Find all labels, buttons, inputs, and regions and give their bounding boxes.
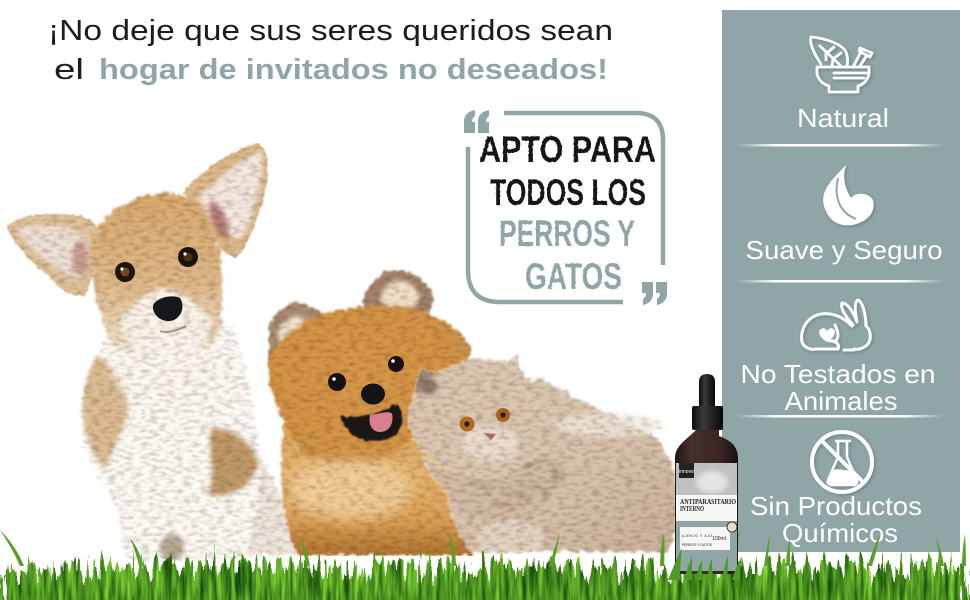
kitten dark fur marks (470, 482, 550, 510)
corgi hind shadow between legs (160, 534, 184, 562)
corgi puppy (7, 143, 297, 562)
label: natural: Natural (797, 103, 889, 133)
pomeranian chest (288, 460, 412, 520)
kitten eyes (460, 408, 510, 432)
kitten fur (408, 352, 678, 554)
grass (0, 566, 970, 600)
icon: mortar with leaf (811, 37, 872, 92)
corgi body (81, 325, 259, 560)
pomeranian fur (268, 270, 485, 556)
pomeranian mouth (340, 404, 402, 441)
pomeranian puppy (268, 270, 485, 556)
label: not tested on animals: No Testados en (740, 359, 936, 389)
feature: no chemicals: Químicos (782, 518, 898, 548)
quote text: PERROS Y (499, 213, 635, 254)
kitten head (408, 359, 548, 478)
corgi head (92, 192, 223, 361)
divider (736, 280, 944, 282)
closing quote mark (642, 282, 667, 305)
heading line 1: ¡No deje que sus seres queridos sean (48, 15, 613, 47)
kitten body (448, 378, 678, 552)
kitten chest (420, 455, 554, 530)
kitten nose (484, 433, 496, 440)
bottle label: PERROS Y GATOS (682, 543, 713, 547)
pomeranian left ear (268, 302, 327, 367)
kitten left ear (415, 368, 452, 396)
feature: not tested on animals: Animales (784, 386, 898, 416)
pomeranian eyes (328, 356, 404, 391)
persian kitten (408, 352, 678, 554)
pomeranian body (281, 410, 485, 556)
heading line 2 highlight: hogar de invitados no deseados! (99, 54, 608, 86)
grass over bottle (668, 548, 742, 580)
corgi blaze (121, 288, 212, 355)
heading line 2 dark part: el (54, 54, 84, 86)
kitten front paw (479, 521, 546, 554)
pomeranian nose (361, 384, 385, 404)
label: gentle and safe: Suave y Seguro (746, 235, 942, 265)
label brand tab (679, 463, 694, 478)
corgi mouth (160, 326, 186, 332)
bottle label: AJENJO Y AJO (682, 534, 712, 538)
feature: gentle and safe (746, 165, 942, 265)
side panel (722, 10, 960, 552)
quote frame (468, 113, 663, 302)
divider (736, 415, 944, 418)
icon: rabbit (802, 300, 870, 350)
kitten right ear (500, 352, 520, 384)
feature: natural (797, 37, 889, 133)
bottle label: ANTIPARASITARIO (680, 498, 736, 506)
heading (48, 15, 613, 86)
kitten muzzle (460, 426, 520, 462)
quote text: GATOS (525, 256, 622, 297)
divider (736, 144, 944, 146)
corgi left shoulder (82, 355, 128, 468)
dropper bulb (699, 374, 715, 406)
quote text: APTO PARA (479, 129, 656, 170)
bottle label: INTERNO (680, 505, 704, 513)
label teal band (676, 521, 737, 571)
corgi eyes (115, 247, 198, 282)
feature: no chemicals (750, 432, 922, 548)
label seal (727, 522, 737, 532)
kitten back haze (555, 413, 665, 437)
corgi neck (116, 338, 228, 406)
corgi rear (232, 430, 297, 556)
bottle label: 100ml (712, 536, 726, 542)
pomeranian head (268, 306, 472, 464)
kitten inner ear (418, 378, 438, 394)
label white band (676, 495, 737, 521)
label photo band (676, 463, 737, 495)
dropper collar (692, 406, 723, 430)
bottle label: innovo (679, 469, 694, 475)
bottle label (676, 463, 737, 571)
quote text: TODOS LOS (490, 172, 646, 213)
panel background (722, 10, 960, 552)
corgi fur (7, 143, 297, 562)
quote text (479, 129, 656, 297)
corgi right ear (183, 143, 268, 258)
corgi nose (153, 296, 182, 321)
bottle glass (675, 430, 738, 574)
kitten neck shadow (498, 459, 562, 491)
pomeranian right ear (362, 270, 435, 322)
icon: rabbit heart (819, 328, 835, 342)
quote box (464, 110, 667, 305)
thin grass blades (0, 530, 966, 566)
label: no chemicals: Sin Productos (750, 491, 922, 521)
pomeranian tongue (369, 412, 392, 432)
corgi right shoulder (208, 428, 258, 496)
icon: crossed flask (812, 432, 872, 492)
icon: feather (823, 165, 874, 225)
corgi left ear (7, 214, 100, 296)
opening quote mark (464, 110, 489, 133)
product bottle (668, 374, 742, 580)
feature: not tested on animals (740, 300, 936, 416)
